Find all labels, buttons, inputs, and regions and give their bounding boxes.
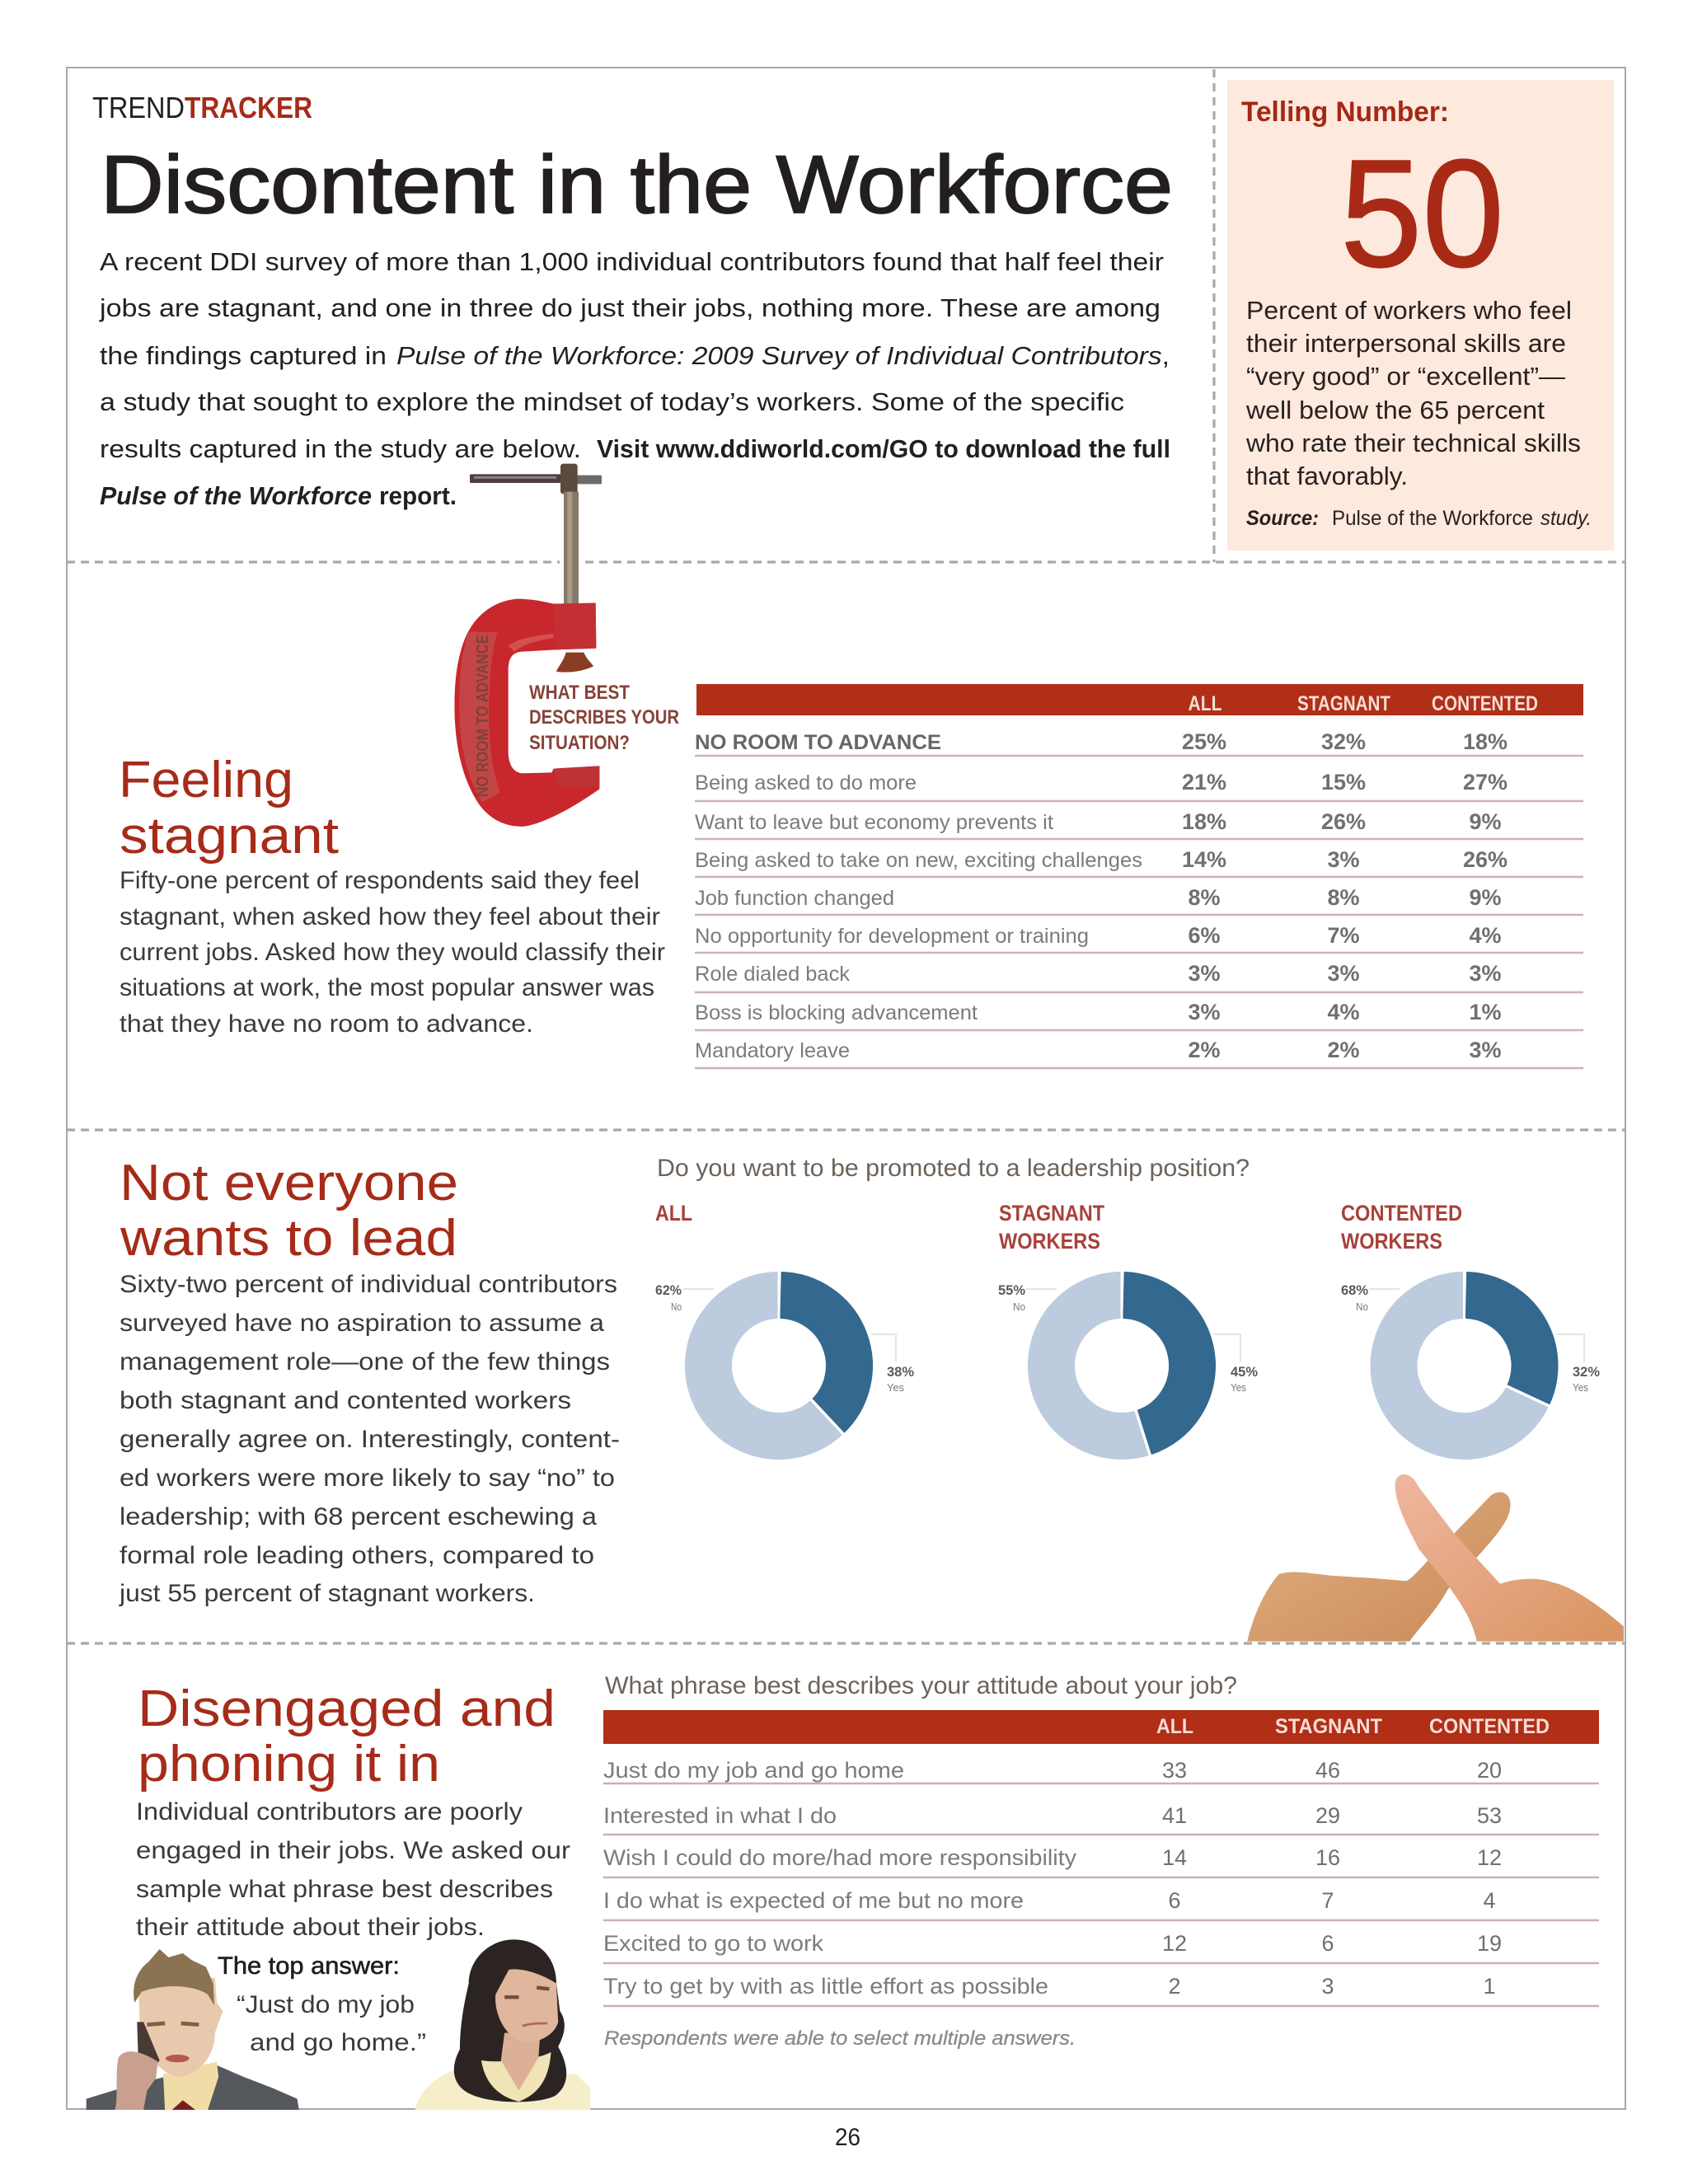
source line — [1246, 507, 1592, 530]
table: attitude about job: 12 — [1162, 1931, 1187, 1956]
donut chart: stagnant workers: WORKERS — [999, 1229, 1100, 1254]
table: what best describes your situation: 18% — [1182, 809, 1226, 834]
text block: feeling stagnant: Fifty-one percent of respondents said they feel — [120, 867, 640, 894]
title: Discontent in the Workforce — [101, 138, 1173, 230]
table: what best describes your situation: 15% — [1321, 770, 1366, 794]
table: attitude about job: 16 — [1315, 1845, 1340, 1870]
table header: CONTENTED — [1432, 692, 1538, 715]
table: what best describes your situation: Mandatory leave — [695, 1039, 850, 1062]
icon: woman looking away — [415, 1939, 590, 2110]
source line: study. — [1540, 507, 1592, 530]
table question: What phrase best describes your attitude about your job? — [605, 1672, 1237, 1699]
text block: disengaged: Individual contributors are poorly — [136, 1798, 523, 1825]
text block: not everyone wants to lead: surveyed have no aspiration to assume a — [120, 1310, 604, 1337]
table: what best describes your situation: 3% — [1188, 961, 1221, 986]
table: what best describes your situation: 3% — [1188, 1000, 1221, 1024]
intro text block: report. — [379, 481, 457, 510]
table: attitude about job: 3 — [1321, 1974, 1334, 1999]
table: attitude about job: Just do my job and go home — [603, 1758, 904, 1783]
table: attitude about job: 2 — [1168, 1974, 1181, 1999]
table: what best describes your situation: Role dialed back — [695, 963, 851, 986]
donut chart: contented workers: 68% — [1341, 1282, 1368, 1298]
table: what best describes your situation: No opportunity for development or training — [695, 925, 1089, 948]
text block: not everyone wants to lead: both stagnant and contented workers — [120, 1387, 571, 1414]
table: what best describes your situation: 8% — [1188, 885, 1221, 910]
text block: not everyone wants to lead: formal role leading others, compared to — [120, 1542, 594, 1569]
intro text block: A recent DDI survey of more than 1,000 individual contributors found that half feel their — [100, 247, 1164, 276]
icon: red C-clamp — [454, 464, 602, 827]
donut chart: stagnant workers: 55% — [998, 1282, 1025, 1298]
intro text block: Pulse of the Workforce — [100, 481, 372, 510]
text block: disengaged: engaged in their jobs. We asked our — [136, 1837, 570, 1864]
text block: not everyone wants to lead: generally agree on. Interestingly, content- — [120, 1426, 620, 1453]
telling number description: Percent of workers who feel — [1246, 296, 1572, 325]
telling number description: “very good” or “excellent”— — [1246, 362, 1565, 391]
clamp caption — [529, 682, 679, 754]
table: what best describes your situation: Job function changed — [695, 887, 894, 910]
table: attitude about job: Excited to go to work — [603, 1931, 824, 1956]
table header — [603, 1710, 1599, 1744]
clamp lettering: NO ROOM TO ADVANCE — [474, 635, 492, 797]
icon: man on the phone — [87, 1949, 299, 2110]
table: attitude about job: 19 — [1477, 1931, 1502, 1956]
callout: the top answer: The top answer: — [218, 1952, 400, 1980]
donut chart: stagnant workers — [998, 1201, 1258, 1460]
callout: the top answer: “Just do my job — [237, 1991, 415, 2018]
text block: disengaged — [136, 1798, 570, 1941]
donut chart: stagnant workers: No — [1013, 1301, 1025, 1313]
table: attitude about job: 29 — [1315, 1803, 1340, 1828]
heading: feeling stagnant: Feeling — [119, 752, 293, 808]
heading: feeling stagnant — [119, 752, 339, 865]
table: what best describes your situation: 26% — [1321, 809, 1366, 834]
table footnote: Respondents were able to select multiple answers. — [604, 2027, 1076, 2050]
table: what best describes your situation: 25% — [1182, 729, 1226, 754]
intro text block: jobs are stagnant, and one in three do just their jobs, nothing more. These are among — [99, 293, 1160, 322]
text block: disengaged: their attitude about their jobs. — [136, 1914, 485, 1941]
donut chart: all: No — [671, 1301, 682, 1313]
table: what best describes your situation: Being asked to take on new, exciting challenges — [695, 849, 1142, 872]
table: what best describes your situation: NO ROOM TO ADVANCE — [695, 731, 941, 754]
table: attitude about job: 6 — [1321, 1931, 1334, 1956]
table: what best describes your situation: 21% — [1182, 770, 1226, 794]
intro text block: Visit www.ddiworld.com/GO to download the full — [597, 434, 1170, 463]
donut chart: contented workers: CONTENTED — [1341, 1201, 1462, 1226]
table: attitude about job: 46 — [1315, 1758, 1340, 1783]
table: attitude about job: 53 — [1477, 1803, 1502, 1828]
table: what best describes your situation: Want to leave but economy prevents it — [695, 811, 1053, 834]
table: attitude about job: Interested in what I do — [603, 1803, 837, 1828]
table header: CONTENTED — [1429, 1715, 1550, 1738]
text block: feeling stagnant: stagnant, when asked how they feel about their — [120, 903, 660, 930]
callout: the top answer: and go home.” — [250, 2029, 426, 2056]
table: attitude about job: 1 — [1483, 1974, 1496, 1999]
table: attitude about job: 20 — [1477, 1758, 1502, 1783]
brand label: TrendTracker: TREND — [92, 91, 185, 124]
heading: disengaged and phoning it in — [138, 1680, 556, 1793]
text block: feeling stagnant: that they have no room to advance. — [120, 1010, 533, 1038]
table: what best describes your situation: 32% — [1321, 729, 1366, 754]
table: attitude about job: 6 — [1168, 1888, 1181, 1913]
intro text block — [99, 247, 1170, 510]
table header: ALL — [1156, 1715, 1193, 1738]
donut chart: all: ALL — [655, 1201, 692, 1226]
telling number description — [1245, 296, 1581, 490]
table header — [696, 684, 1583, 715]
text block: not everyone wants to lead: just 55 percent of stagnant workers. — [119, 1580, 535, 1607]
table: what best describes your situation: 14% — [1182, 847, 1226, 872]
intro text block: results captured in the study are below. — [100, 434, 581, 463]
table: attitude about job: Wish I could do more/had more responsibility — [603, 1845, 1077, 1870]
text block: not everyone wants to lead — [119, 1271, 620, 1607]
table: attitude about job: 14 — [1162, 1845, 1187, 1870]
table: what best describes your situation: 7% — [1327, 923, 1360, 948]
clamp caption: SITUATION? — [529, 732, 630, 754]
heading: not everyone wants to lead — [120, 1155, 458, 1267]
table: attitude about job: 41 — [1162, 1803, 1187, 1828]
text block: not everyone wants to lead: ed workers were more likely to say “no” to — [120, 1465, 615, 1492]
table: what best describes your situation: 9% — [1469, 885, 1502, 910]
table: attitude about job: 33 — [1162, 1758, 1187, 1783]
text block: not everyone wants to lead: Sixty-two percent of individual contributors — [120, 1271, 617, 1298]
source line: Source: — [1246, 507, 1319, 530]
table: what best describes your situation: 1% — [1469, 1000, 1502, 1024]
heading: disengaged and phoning it in: phoning it in — [138, 1736, 440, 1793]
table: what best describes your situation: 6% — [1188, 923, 1221, 948]
table: what best describes your situation: 9% — [1469, 809, 1502, 834]
callout: the top answer — [218, 1952, 426, 2056]
brand label: TrendTracker: TRACKER — [185, 91, 312, 124]
telling number description: well below the 65 percent — [1245, 396, 1545, 424]
donut chart: all — [655, 1201, 914, 1436]
table: attitude about job — [603, 1710, 1599, 2006]
table: what best describes your situation: 27% — [1463, 770, 1507, 794]
panel: telling number — [1227, 80, 1614, 551]
text block: feeling stagnant — [120, 867, 665, 1038]
table header: STAGNANT — [1275, 1715, 1382, 1738]
telling number description: their interpersonal skills are — [1246, 329, 1566, 358]
big number 50: 50 — [1340, 129, 1504, 299]
heading: disengaged and phoning it in: Disengaged and — [138, 1680, 556, 1737]
table: what best describes your situation: 3% — [1469, 961, 1502, 986]
donut chart: stagnant workers: STAGNANT — [999, 1201, 1104, 1226]
telling number description: that favorably. — [1246, 462, 1408, 490]
brand label: TrendTracker — [92, 91, 312, 124]
donut chart: contented workers: 32% — [1573, 1364, 1600, 1380]
table: what best describes your situation: 26% — [1463, 847, 1507, 872]
page number: 26 — [835, 2124, 860, 2151]
donut chart: contented workers — [1341, 1201, 1600, 1436]
telling number heading: Telling Number: — [1241, 96, 1449, 128]
donut chart: all: 38% — [887, 1364, 914, 1380]
source line: Pulse of the Workforce — [1332, 507, 1533, 530]
table: attitude about job: 4 — [1483, 1888, 1496, 1913]
intro text block: the findings captured in — [100, 341, 387, 370]
table: what best describes your situation: 8% — [1327, 885, 1360, 910]
table: what best describes your situation: Being asked to do more — [695, 771, 917, 794]
table: attitude about job: 12 — [1477, 1845, 1502, 1870]
text block: not everyone wants to lead: leadership; with 68 percent eschewing a — [120, 1503, 597, 1530]
icon: crossed fingers hands — [1247, 1474, 1624, 1642]
clamp caption: DESCRIBES YOUR — [529, 706, 679, 729]
table: attitude about job: 7 — [1321, 1888, 1334, 1913]
text block: feeling stagnant: situations at work, the most popular answer was — [120, 974, 654, 1001]
donut chart: stagnant workers: Yes — [1231, 1381, 1246, 1394]
donut chart: contented workers: Yes — [1573, 1381, 1588, 1394]
text block: not everyone wants to lead: management role—one of the few things — [120, 1348, 610, 1376]
donut chart: all: Yes — [887, 1381, 904, 1394]
table: what best describes your situation: 3% — [1327, 847, 1360, 872]
text block: feeling stagnant: current jobs. Asked how they would classify their — [120, 939, 665, 966]
table: what best describes your situation — [695, 684, 1583, 1068]
donut chart: contented workers: No — [1356, 1301, 1368, 1313]
table: attitude about job: Try to get by with as little effort as possible — [603, 1974, 1048, 1999]
telling number description: who rate their technical skills — [1245, 429, 1581, 457]
chart question: Do you want to be promoted to a leadership position? — [657, 1155, 1250, 1182]
heading: not everyone wants to lead: Not everyone — [120, 1155, 458, 1212]
table: what best describes your situation: 3% — [1327, 961, 1360, 986]
table: what best describes your situation: 2% — [1188, 1038, 1221, 1062]
heading: feeling stagnant: stagnant — [120, 808, 339, 865]
clamp caption: WHAT BEST — [529, 682, 630, 704]
donut chart: contented workers: WORKERS — [1341, 1229, 1442, 1254]
table: what best describes your situation: 18% — [1463, 729, 1507, 754]
intro text block: a study that sought to explore the mindset of today’s workers. Some of the specific — [100, 387, 1124, 416]
donut chart: stagnant workers: 45% — [1231, 1364, 1258, 1380]
table: what best describes your situation: 4% — [1327, 1000, 1360, 1024]
donut chart: all: 62% — [655, 1282, 682, 1298]
text block: disengaged: sample what phrase best describes — [136, 1876, 553, 1903]
table header: ALL — [1189, 692, 1221, 715]
table: what best describes your situation: 3% — [1469, 1038, 1502, 1062]
intro text block: Pulse of the Workforce: 2009 Survey of Individual Contributors , — [396, 341, 1170, 370]
table header: STAGNANT — [1297, 692, 1390, 715]
table: what best describes your situation: 4% — [1469, 923, 1502, 948]
table: what best describes your situation: Boss is blocking advancement — [695, 1001, 978, 1024]
heading: not everyone wants to lead: wants to lead — [120, 1210, 457, 1267]
table: attitude about job: I do what is expected of me but no more — [603, 1888, 1024, 1913]
table: what best describes your situation: 2% — [1327, 1038, 1360, 1062]
